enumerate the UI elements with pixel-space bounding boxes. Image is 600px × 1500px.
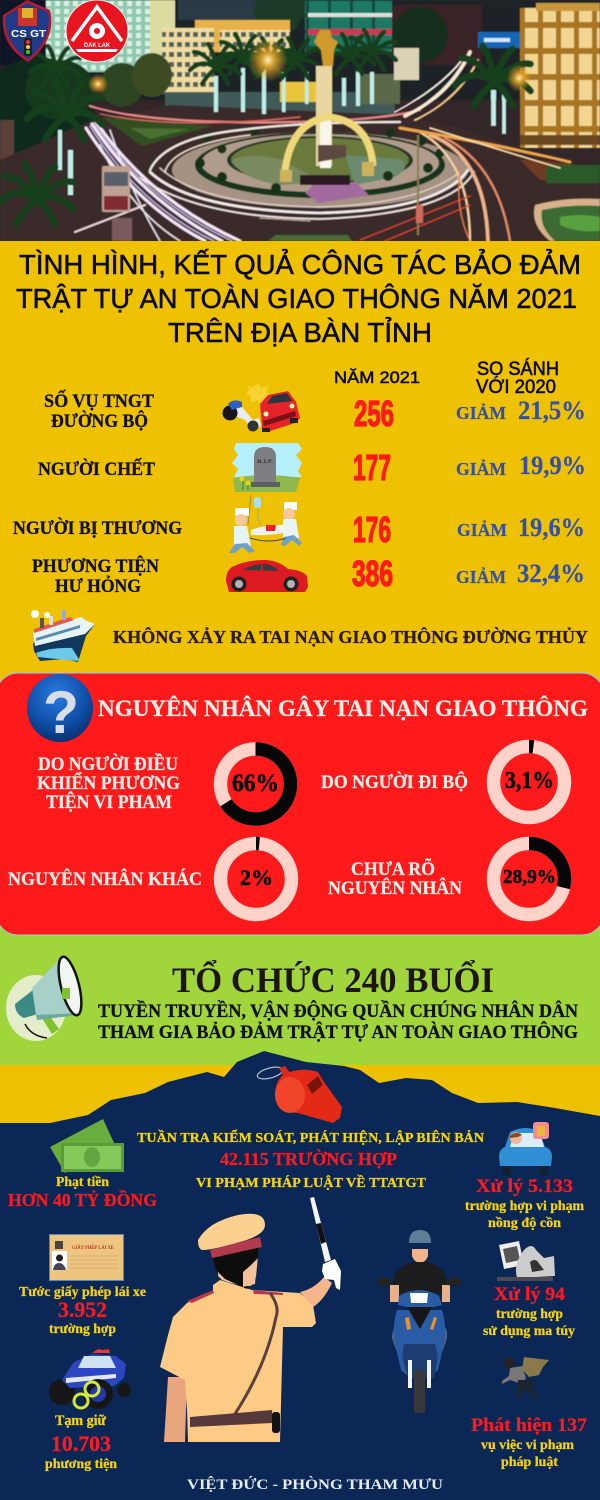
cause: drivers 66% xyxy=(37,749,290,819)
change xyxy=(456,396,586,425)
subtext xyxy=(98,1000,578,1043)
icon: ship xyxy=(31,610,95,662)
value: 386 xyxy=(352,553,393,594)
cause: drivers 66%: DO NGƯỜI ĐIỀU xyxy=(38,753,178,775)
icon: gravestone xyxy=(232,443,302,492)
waterway note with ship xyxy=(31,610,588,662)
change xyxy=(456,451,586,480)
icon: megaphone xyxy=(6,955,86,1041)
cause: other 2%: 2% xyxy=(240,865,273,890)
cause: pedestrians 3.1%: DO NGƯỜI ĐI BỘ xyxy=(321,771,468,793)
big heading: TỔ CHỨC 240 BUỔI xyxy=(172,959,494,1000)
icon: question sphere: ? xyxy=(43,679,79,746)
donut chart 2% xyxy=(220,844,292,914)
donut chart 28.9% xyxy=(494,844,564,914)
icon: red car xyxy=(226,560,308,592)
illustration: traffic officer xyxy=(160,1197,341,1442)
title xyxy=(16,248,581,348)
impound block: phương tiện xyxy=(45,1457,117,1472)
change: 19,6% xyxy=(518,513,585,542)
licence block: 3.952 xyxy=(58,1297,107,1322)
panel: enforcement xyxy=(0,1051,600,1500)
icon: crash car and scooter xyxy=(222,383,300,432)
violation block xyxy=(471,1357,588,1470)
column header: compared with 2020 xyxy=(476,359,559,398)
cause: drivers 66%: 66% xyxy=(232,770,279,797)
change: 21,5% xyxy=(518,396,586,425)
cause: unknown 28.9%: NGUYÊN NHÂN xyxy=(328,877,462,899)
cause: other 2% xyxy=(8,844,292,914)
panel: road safety results xyxy=(0,241,600,701)
panel: causes of accidents xyxy=(0,673,600,935)
value: 177 xyxy=(353,447,391,488)
cause: other 2%: NGUYÊN NHÂN KHÁC xyxy=(8,868,202,890)
centre text: 42.115 TRƯỜNG HỢP xyxy=(220,1148,397,1169)
fine block: Phạt tiền xyxy=(56,1175,109,1190)
logo: CSGT shield xyxy=(3,0,51,62)
column header: year 2021: NĂM 2021 xyxy=(334,368,420,387)
violation block: pháp luật xyxy=(501,1455,558,1470)
drug block: Xử lý 94 xyxy=(494,1284,566,1305)
change: GIẢM xyxy=(457,520,507,540)
subtext: THAM GIA BẢO ĐẢM TRẬT TỰ AN TOÀN GIAO THÔNG xyxy=(98,1021,578,1043)
centre text: VI PHẠM PHÁP LUẬT VỀ TTATGT xyxy=(196,1174,427,1191)
cause: unknown 28.9%: CHƯA RÕ xyxy=(351,858,435,880)
change: 19,9% xyxy=(519,451,586,480)
icon: drug use sketch xyxy=(497,1241,555,1281)
icon: question sphere xyxy=(27,674,93,746)
row: road accidents xyxy=(44,383,586,434)
row: damaged vehicles xyxy=(32,553,585,597)
row: road accidents: SỐ VỤ TNGT xyxy=(44,390,154,412)
licence block: Tước giấy phép lái xe xyxy=(19,1285,146,1300)
fine block: HƠN 40 TỶ ĐỒNG xyxy=(8,1189,157,1210)
row: road accidents: ĐƯỜNG BỘ xyxy=(51,410,148,432)
drug block: sử dụng ma túy xyxy=(483,1324,575,1339)
heading: NGUYÊN NHÂN GÂY TAI NẠN GIAO THÔNG xyxy=(98,695,588,721)
centre text xyxy=(137,1128,484,1191)
icon: medics with stretcher xyxy=(229,495,302,553)
drink driving block: trường hợp vi phạm xyxy=(465,1199,584,1214)
change: GIẢM xyxy=(456,567,506,587)
title: TÌNH HÌNH, KẾT QUẢ CÔNG TÁC BẢO ĐẢM xyxy=(19,248,581,280)
column header: compared with 2020: SO SÁNH xyxy=(477,359,559,380)
logo: Dak Lak: DAK LAK xyxy=(84,43,111,49)
column header: compared with 2020: VỚI 2020 xyxy=(476,376,556,398)
icon: police truck with handcuffs xyxy=(49,1349,131,1409)
cause: unknown 28.9% xyxy=(328,844,564,914)
subtext: TUYỀN TRUYỀN, VẬN ĐỘNG QUẦN CHÚNG NHÂN DÂN xyxy=(98,1000,578,1022)
cause: drivers 66%: KHIỂN PHƯƠNG xyxy=(37,772,180,794)
violation block: Phát hiện 137 xyxy=(471,1415,588,1436)
title: TRÊN ĐỊA BÀN TỈNH xyxy=(168,316,432,348)
centre text: TUẦN TRA KIỂM SOÁT, PHÁT HIỆN, LẬP BIÊN BẢN xyxy=(137,1128,484,1146)
value: 176 xyxy=(353,509,391,550)
licence block xyxy=(19,1234,146,1337)
licence block: trường hợp xyxy=(49,1322,116,1337)
row: damaged vehicles: PHƯƠNG TIỆN xyxy=(32,555,159,577)
credit line: VIỆT ĐỨC - PHÒNG THAM MƯU xyxy=(187,1476,443,1493)
row: damaged vehicles: HƯ HỎNG xyxy=(55,575,141,597)
drink driving block xyxy=(465,1122,584,1231)
cause: pedestrians 3.1%: 3,1% xyxy=(505,768,554,794)
illustration: motorbike rider xyxy=(377,1230,461,1413)
header photo: roundabout at night xyxy=(0,0,600,250)
row: deaths: NGƯỜI CHẾT xyxy=(38,458,155,480)
drink driving block: Xử lý 5.133 xyxy=(476,1176,573,1197)
violation block: vụ việc vi phạm xyxy=(481,1438,574,1453)
cause: unknown 28.9%: 28,9% xyxy=(503,866,556,888)
drug block xyxy=(483,1241,575,1339)
change: 32,4% xyxy=(517,559,585,588)
drink driving block: nồng độ cồn xyxy=(488,1216,561,1231)
icon: thief with sack xyxy=(502,1357,549,1400)
panel: green background strip xyxy=(0,915,600,1065)
logo: CSGT shield: CS GT xyxy=(11,29,46,40)
fine block xyxy=(8,1119,157,1210)
icon: whistle xyxy=(256,1065,342,1123)
row: injured xyxy=(13,495,585,553)
donut chart 66% xyxy=(220,749,290,819)
cause: pedestrians 3.1% xyxy=(321,746,564,818)
panel: propaganda sessions xyxy=(6,955,578,1043)
icon: driving licence: GIẤY PHÉP LÁI XE xyxy=(72,1245,115,1251)
icon: car with beer xyxy=(499,1122,552,1175)
change: GIẢM xyxy=(456,403,506,423)
icon: banknotes xyxy=(50,1119,124,1173)
title: TRẬT TỰ AN TOÀN GIAO THÔNG NĂM 2021 xyxy=(16,283,577,314)
row: injured: NGƯỜI BỊ THƯƠNG xyxy=(13,517,182,539)
row: deaths xyxy=(38,443,586,492)
change xyxy=(456,559,585,588)
impound block xyxy=(45,1349,131,1472)
logo: Dak Lak xyxy=(66,0,128,62)
change: GIẢM xyxy=(456,459,506,479)
drug block: trường hợp xyxy=(496,1307,563,1322)
change xyxy=(457,513,585,542)
icon: gravestone: R.I.P. xyxy=(257,460,274,465)
donut chart 3.1% xyxy=(494,746,564,818)
impound block: Tạm giữ xyxy=(55,1413,107,1429)
value: 256 xyxy=(354,393,394,434)
note text: KHÔNG XẢY RA TAI NẠN GIAO THÔNG ĐƯỜNG THỦY xyxy=(113,626,588,647)
cause: drivers 66%: TIỆN VI PHAM xyxy=(46,791,172,813)
impound block: 10.703 xyxy=(51,1431,111,1456)
